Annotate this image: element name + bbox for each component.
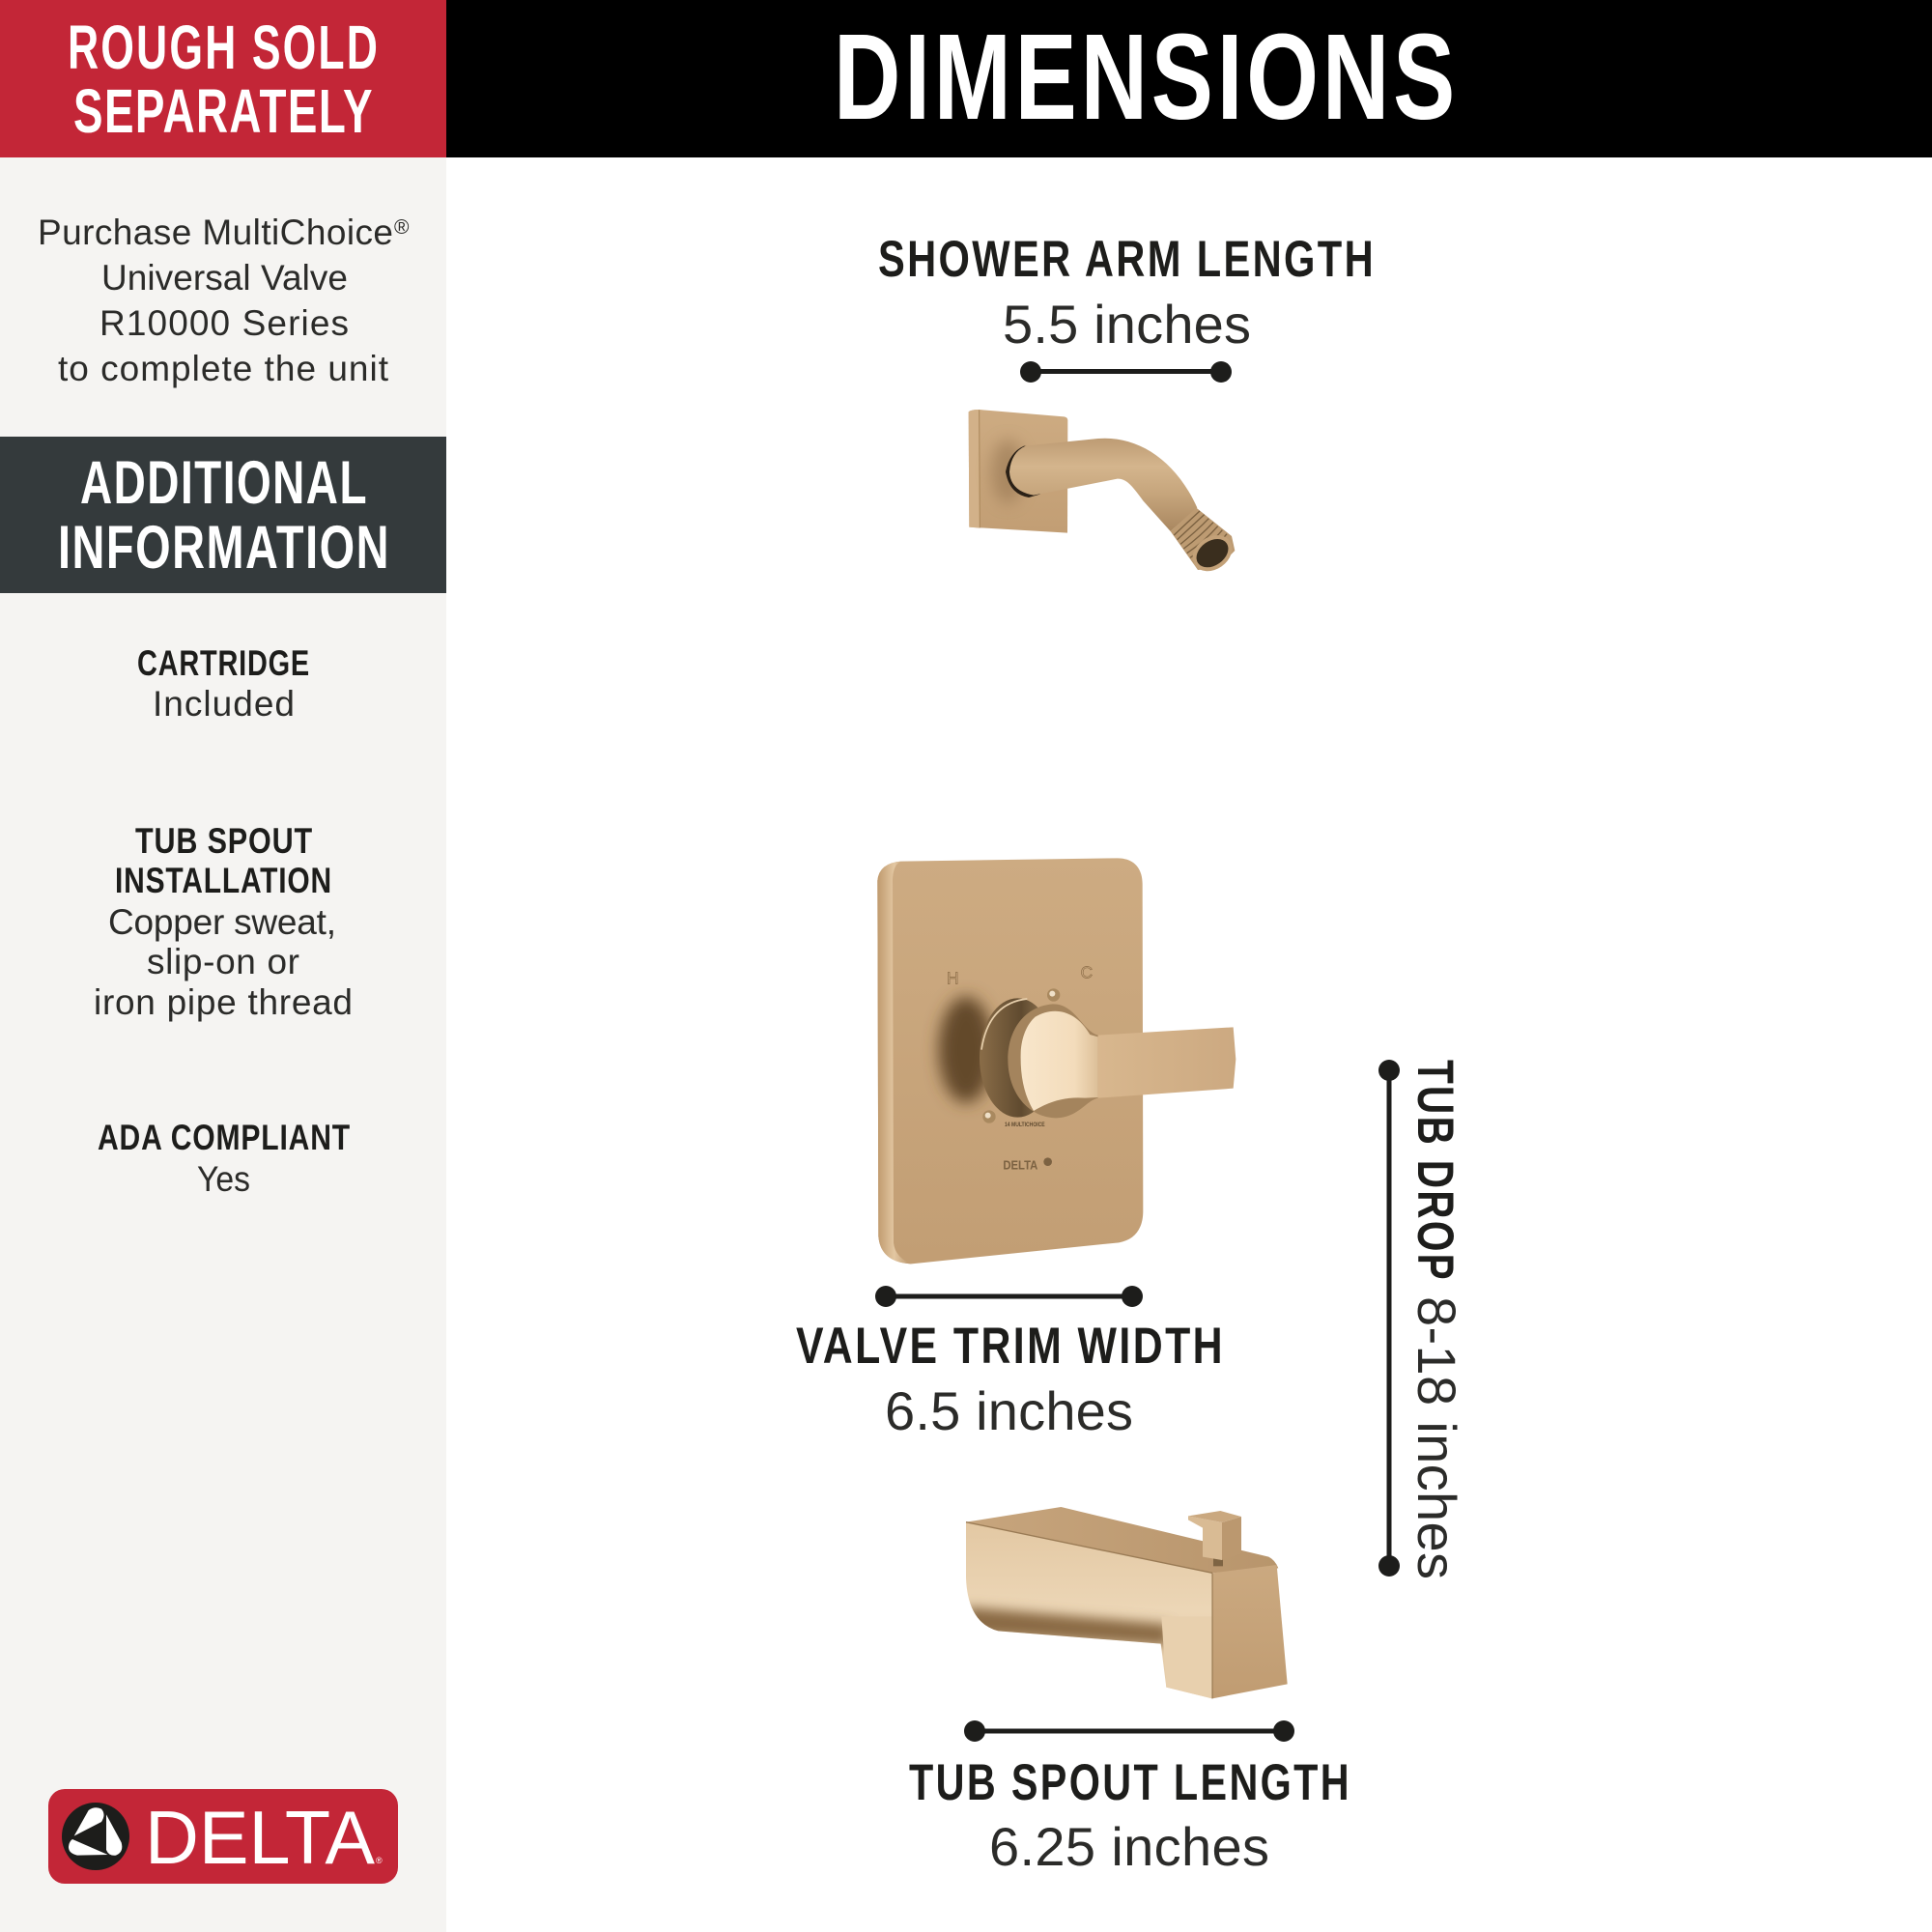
product: valve trim (877, 858, 1236, 1264)
title banner: dimensions (446, 0, 1932, 157)
text block: purchase valve note: to complete the unit (58, 349, 389, 388)
logo: delta (48, 1789, 398, 1884)
dimension line: tub drop (1378, 1060, 1400, 1577)
label: tub spout length (909, 1754, 1351, 1877)
text block: ada compliant: ADA COMPLIANT (98, 1118, 351, 1157)
product: tub spout (966, 1507, 1288, 1698)
product: valve trim: H (947, 968, 959, 987)
text block: tub spout installation: TUB SPOUT (135, 821, 313, 861)
logo: delta: ® (376, 1856, 383, 1865)
text block: ada compliant (98, 1118, 351, 1199)
product: valve trim: DELTA (1003, 1158, 1038, 1173)
label: valve trim width: 6.5 inches (885, 1380, 1133, 1441)
heading: additional information: ADDITIONAL (80, 449, 368, 517)
logo: delta: DELTA (145, 1795, 375, 1880)
heading: additional information (0, 437, 446, 593)
text block: purchase valve note: Purchase MultiChoice (38, 213, 393, 252)
banner: rough sold separately: SEPARATELY (73, 76, 374, 146)
product: shower arm (969, 410, 1239, 579)
dimension line: valve trim (875, 1286, 1143, 1307)
text block: tub spout installation: iron pipe thread (94, 982, 353, 1022)
text block: purchase valve note: R10000 Series (99, 303, 349, 343)
dimension line: tub spout (964, 1720, 1294, 1742)
text block: tub spout installation: slip-on or (147, 942, 299, 981)
product: valve trim: 14 MULTICHOICE (1005, 1122, 1045, 1128)
title banner: dimensions: DIMENSIONS (834, 9, 1459, 145)
text block: purchase valve note: Universal Valve (101, 258, 348, 298)
heading: additional information: INFORMATION (58, 514, 390, 582)
text block: tub spout installation: INSTALLATION (115, 861, 332, 900)
label: tub spout length: 6.25 inches (989, 1816, 1269, 1877)
label: tub spout length: TUB SPOUT LENGTH (909, 1754, 1351, 1811)
text block: purchase valve note: ® (394, 216, 410, 239)
text block: purchase valve note (38, 213, 410, 388)
text block: cartridge: CARTRIDGE (137, 643, 310, 683)
label: shower arm length: 5.5 inches (1003, 294, 1251, 355)
product: valve trim: C (1081, 963, 1093, 982)
panel: left sidebar (0, 0, 446, 1932)
label: tub drop: TUB DROP (1406, 1060, 1463, 1282)
label: tub drop (1406, 1060, 1467, 1579)
label: shower arm length: SHOWER ARM LENGTH (878, 231, 1376, 288)
text block: cartridge (137, 643, 310, 724)
text block: ada compliant: Yes (197, 1159, 250, 1199)
text block: tub spout installation: Copper sweat, (108, 902, 336, 942)
text block: tub spout installation (94, 821, 353, 1022)
label: valve trim width: VALVE TRIM WIDTH (796, 1318, 1225, 1375)
dimension line: shower arm (1020, 361, 1232, 383)
label: tub drop: 8-18 inches (1406, 1296, 1467, 1579)
text block: cartridge: Included (153, 684, 295, 724)
banner: rough sold separately: ROUGH SOLD (68, 13, 380, 82)
banner: rough sold separately (0, 0, 446, 157)
label: valve trim width (796, 1318, 1225, 1441)
label: shower arm length (878, 231, 1376, 355)
